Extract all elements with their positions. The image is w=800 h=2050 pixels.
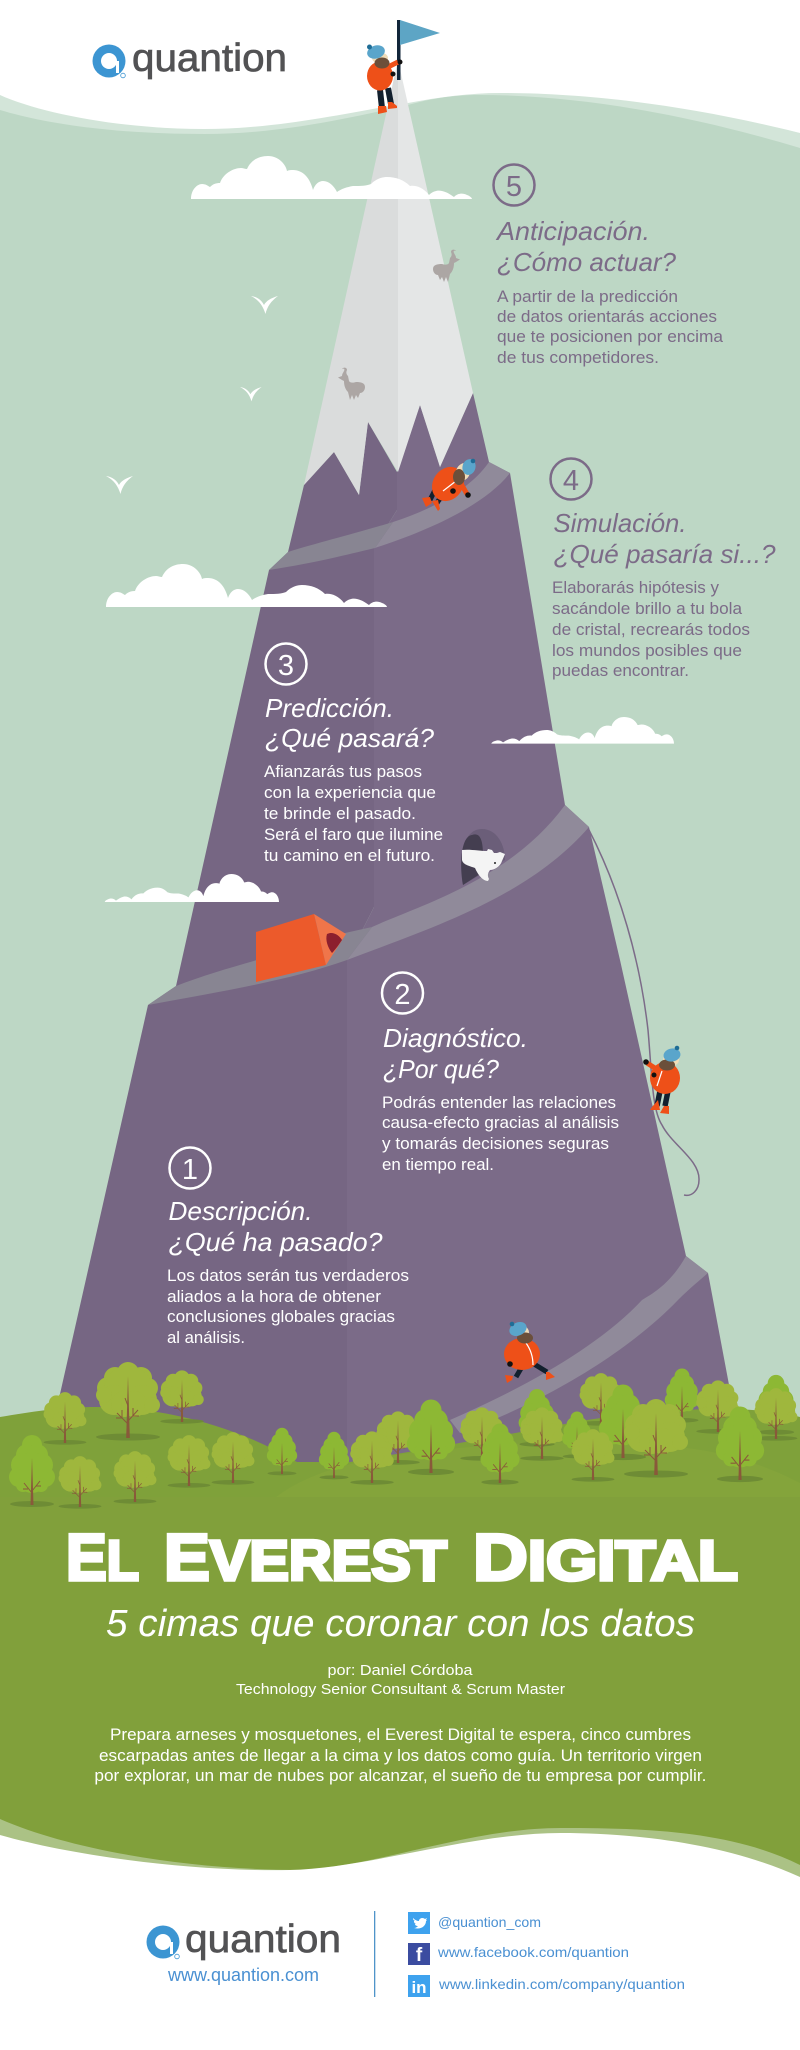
section 5: Anticipación: Anticipación. [495,216,650,246]
intro paragraph: por explorar, un mar de nubes por alcanzar, el sueño de tu empresa por cumplir. [94,1766,706,1785]
social: twitter: @quantion_com [438,1914,541,1930]
llama: upper right [433,250,460,282]
section 5: Anticipación: de datos orientarás acciones [497,307,717,326]
social: linkedin: in [411,1978,427,1997]
section 3: Predicción: 3 [278,650,294,682]
rope [589,830,699,1195]
section 4: Simulación [550,458,776,680]
section 4: Simulación: ¿Qué pasaría si...? [554,539,776,569]
orange tent block [256,914,346,982]
cave and bear [461,829,505,885]
section 3: Predicción: Será el faro que ilumine [264,825,443,844]
climber: summit [366,43,402,114]
social: twitter [408,1912,541,1934]
section 3: Predicción: Afianzarás tus pasos [264,762,422,781]
section 1: Descripción: ¿Qué ha pasado? [168,1227,383,1257]
logo: quantion footer: quantion [185,1918,341,1961]
section 5: Anticipación: de tus competidores. [497,348,659,367]
section 2: Diagnóstico: en tiempo real. [382,1155,494,1174]
section 2: Diagnóstico: y tomarás decisiones seguras [382,1134,609,1153]
title block: DIGITAL [473,1520,738,1594]
flag on summit [397,20,440,80]
cloud: top [191,156,472,199]
section 2: Diagnóstico: Podrás entender las relaciones [382,1093,616,1112]
social: facebook [408,1943,629,1966]
section 1: Descripción: Los datos serán tus verdaderos [167,1266,409,1285]
bird 3 [106,476,133,494]
cloud: middle left [106,564,387,607]
author: por: Daniel Córdoba [328,1662,473,1679]
author: Technology Senior Consultant & Scrum Master [236,1681,565,1698]
footer divider [374,1911,375,1997]
logo: quantion top: quantion [132,37,287,80]
title block [66,1520,738,1645]
section 4: Simulación: Simulación. [554,508,686,538]
intro paragraph: Prepara arneses y mosquetones, el Everest Digital te espera, cinco cumbres [110,1725,691,1744]
mountain [50,60,745,1470]
section 4: Simulación: de cristal, recrearás todos [552,620,750,639]
section 1: Descripción: 1 [182,1154,198,1186]
title block: EVEREST [164,1520,447,1594]
subtitle: 5 cimas que coronar con los datos [106,1603,695,1645]
section 3: Predicción: con la experiencia que [264,783,436,802]
section 3: Predicción: te brinde el pasado. [264,804,416,823]
cloud: right [491,717,674,744]
section 2: Diagnóstico: 2 [394,979,411,1011]
social: facebook: f [416,1945,423,1966]
section 3: Predicción: Predicción. [265,693,394,723]
section 3: Predicción: tu camino en el futuro. [264,846,435,865]
section 1: Descripción [167,1148,409,1347]
section 2: Diagnóstico: ¿Por qué? [383,1054,500,1084]
section 2: Diagnóstico [382,972,619,1174]
trees: right hill [407,1368,797,1485]
website link: www.quantion.com [167,1965,319,1985]
ground: green hills [0,1407,800,1887]
snow cap [304,60,473,495]
section 1: Descripción: Descripción. [168,1196,312,1226]
section 5: Anticipación: ¿Cómo actuar? [497,247,677,277]
section 5: Anticipación [494,164,724,367]
climber: on upper ledge [422,458,477,511]
climber: walking on lower ledge [504,1319,555,1383]
section 4: Simulación: Elaborarás hipótesis y [552,578,719,597]
section 3: Predicción: ¿Qué pasará? [265,723,435,753]
bird 1 [251,296,278,314]
section 5: Anticipación: que te posicionen por encima [497,327,724,346]
social: linkedin [408,1975,685,1997]
path ledge: middle [148,805,589,1005]
section 1: Descripción: aliados a la hora de obtener [167,1287,381,1306]
footer wave [0,1819,800,2050]
author [236,1662,565,1698]
section 2: Diagnóstico: causa-efecto gracias al análisis [382,1113,619,1132]
llama: lower left [338,368,365,400]
social: linkedin: www.linkedin.com/company/quantion [438,1976,685,1992]
section 4: Simulación: los mundos posibles que [552,641,742,660]
trees: left hill and valley [9,1362,420,1509]
section 4: Simulación: 4 [563,465,579,497]
climber: on rope [643,1046,681,1114]
section 2: Diagnóstico: Diagnóstico. [383,1023,528,1053]
section 1: Descripción: conclusiones globales gracias [167,1307,395,1326]
section 3: Predicción [264,644,443,865]
cloud: lower left [105,874,279,902]
section 4: Simulación: sacándole brillo a tu bola [552,599,743,618]
intro paragraph [94,1725,706,1785]
social: facebook: www.facebook.com/quantion [437,1944,629,1960]
path ledge: lower [450,1256,708,1433]
section 4: Simulación: puedas encontrar. [552,661,689,680]
path ledge: upper [269,462,510,570]
section 5: Anticipación: 5 [506,171,522,203]
section 5: Anticipación: A partir de la predicción [497,287,678,306]
intro paragraph: escarpadas antes de llegar a la cima y los datos como guía. Un territorio virgen [99,1746,702,1765]
section 1: Descripción: al análisis. [167,1328,245,1347]
bird 2 [240,387,262,401]
title block: EL [66,1520,139,1594]
